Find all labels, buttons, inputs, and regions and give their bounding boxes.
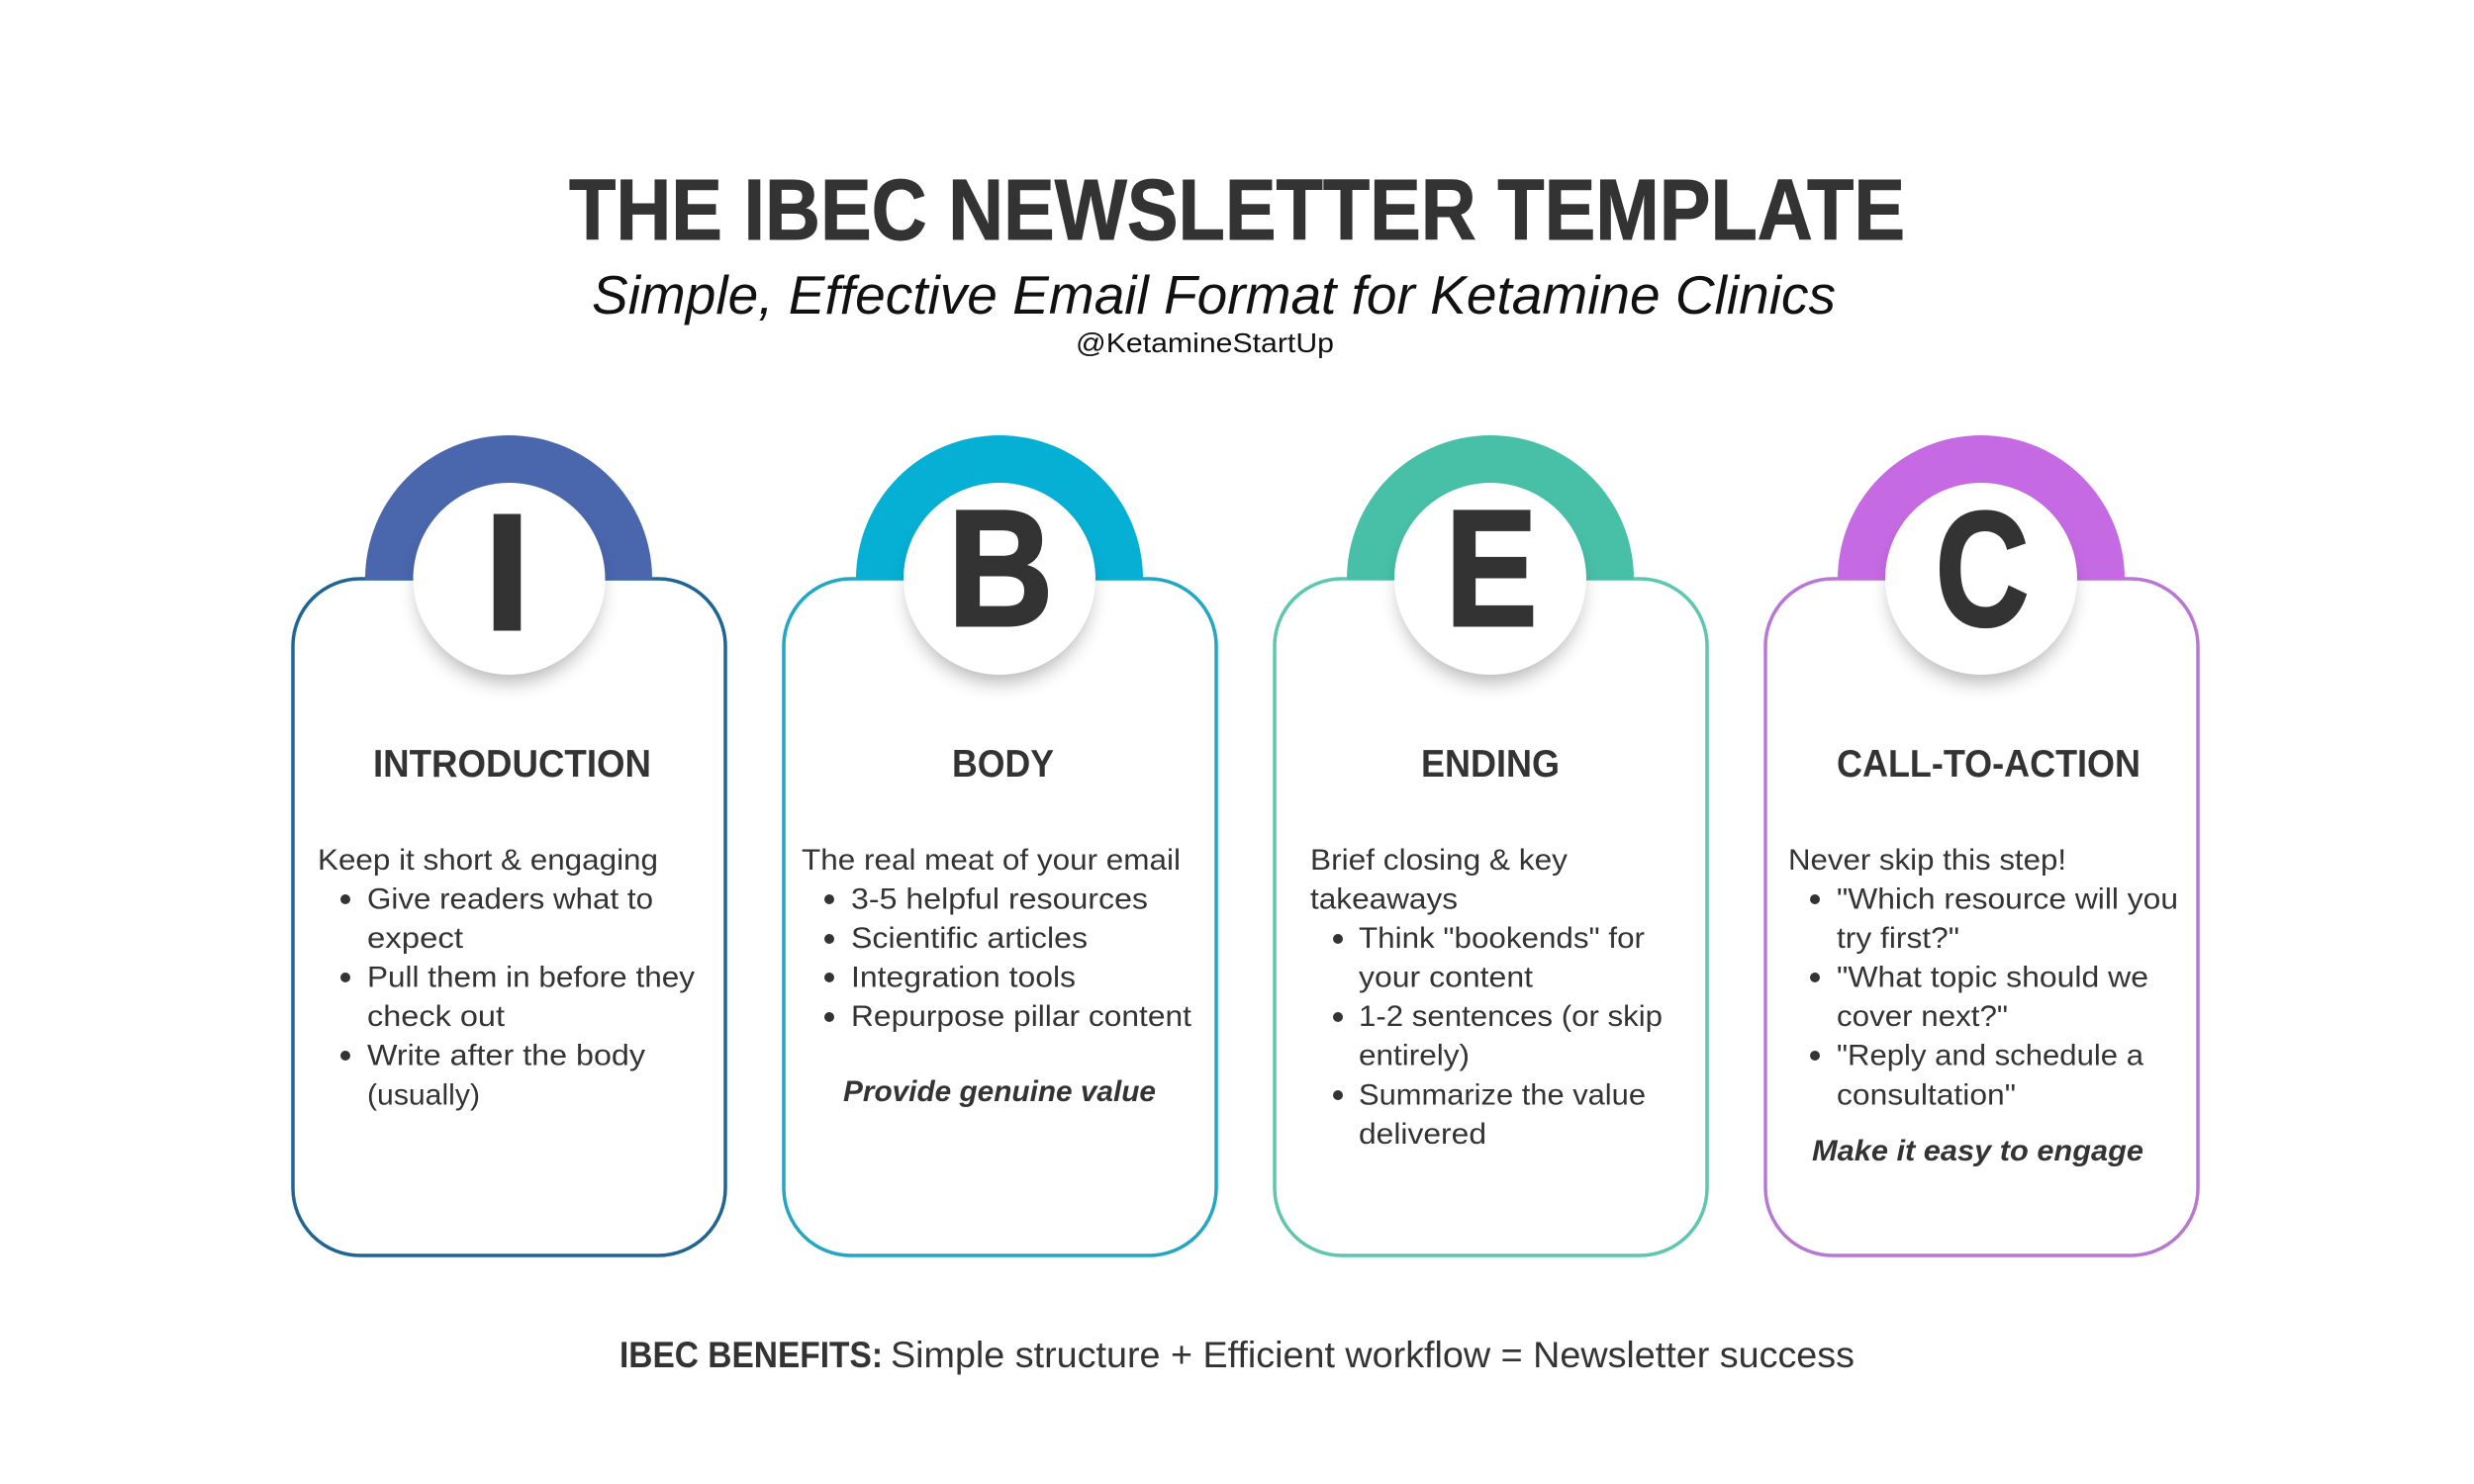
body text: delivered: [1359, 1118, 1486, 1151]
heading: BODY: [952, 743, 1054, 786]
body text: "Reply and schedule a: [1837, 1039, 2143, 1072]
panel: introduction: [293, 435, 725, 1255]
arc: [856, 435, 1143, 580]
key takeaway: Provide genuine value: [843, 1075, 1156, 1108]
body text: entirely): [1359, 1039, 1470, 1072]
body text: (usually): [367, 1078, 480, 1112]
body text: takeaways: [1310, 882, 1458, 916]
panel: ending: [1275, 435, 1707, 1255]
letter C: C: [1936, 477, 2029, 660]
letter I: I: [482, 479, 532, 667]
key takeaway: Make it easy to engage: [1812, 1135, 2143, 1167]
body text: expect: [367, 922, 464, 955]
card outline: [293, 579, 725, 1255]
heading: ENDING: [1421, 743, 1560, 786]
arc: [365, 435, 652, 580]
body text: "Which resource will you: [1837, 882, 2178, 916]
body text: Give readers what to: [367, 882, 653, 916]
letter E: E: [1446, 476, 1537, 661]
arc: [1347, 435, 1634, 580]
body text: Pull them in before they: [367, 962, 695, 993]
letter B: B: [948, 476, 1053, 661]
body text: "What topic should we: [1837, 962, 2148, 993]
card outline: [784, 579, 1216, 1255]
body text: Scientific articles: [851, 922, 1088, 955]
body text: 1-2 sentences (or skip: [1359, 1000, 1663, 1033]
panel: body: [784, 435, 1216, 1255]
body text: Think "bookends" for: [1359, 922, 1645, 955]
body text: Brief closing & key: [1310, 844, 1568, 877]
body text: Summarize the value: [1359, 1078, 1646, 1112]
subtitle: Simple, Effective Email Format for Ketamine Clinics: [592, 264, 1836, 325]
heading: CALL-TO-ACTION: [1837, 743, 2141, 786]
body text: Never skip this step!: [1788, 844, 2066, 877]
panel: call-to-action: [1765, 435, 2198, 1255]
footer: IBEC benefits: Simple structure + Efficient workflow = Newsletter success: [891, 1335, 1855, 1375]
heading: INTRODUCTION: [373, 743, 651, 786]
body text: cover next?": [1837, 1000, 2008, 1033]
body text: Keep it short & engaging: [318, 844, 658, 877]
body text: Repurpose pillar content: [851, 1000, 1192, 1033]
title: THE IBEC NEWSLETTER TEMPLATE: [569, 162, 1905, 258]
body text: try first?": [1837, 922, 1959, 955]
letter badge: [414, 483, 606, 682]
card outline: [1275, 579, 1707, 1255]
body text: Integration tools: [851, 962, 1076, 993]
body text: The real meat of your email: [802, 844, 1181, 877]
body text: [1310, 844, 1663, 1151]
body text: consultation": [1837, 1078, 2016, 1112]
body text: [802, 844, 1192, 1033]
arc: [1838, 435, 2125, 580]
letter badge: [904, 483, 1095, 682]
author handle: @KetamineStartUp: [1076, 327, 1334, 358]
footer: IBEC benefits: IBEC BENEFITS:: [619, 1335, 883, 1375]
body text: 3-5 helpful resources: [851, 882, 1148, 916]
body text: check out: [367, 1000, 506, 1033]
body text: your content: [1359, 962, 1534, 993]
body text: Write after the body: [367, 1039, 645, 1072]
letter badge: [1885, 483, 2077, 682]
letter badge: [1394, 483, 1586, 682]
body text: [318, 844, 695, 1112]
body text: [1788, 844, 2178, 1112]
card outline: [1765, 579, 2198, 1255]
